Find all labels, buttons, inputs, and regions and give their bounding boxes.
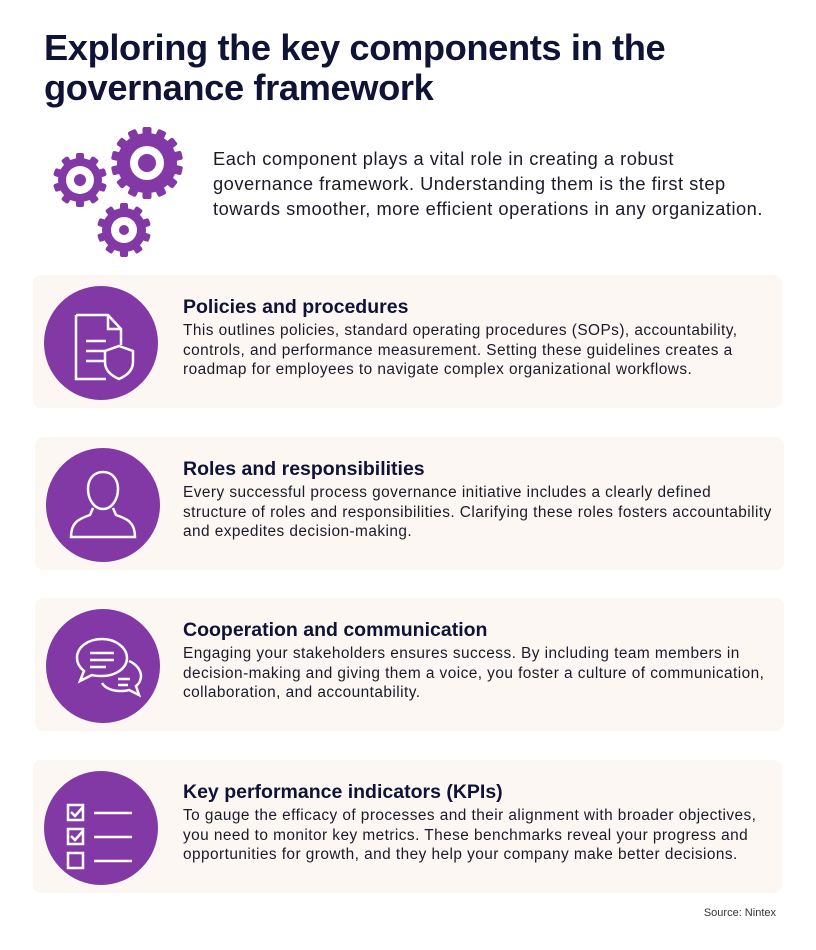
text: Every successful process governance initiative includes a clearly defined (183, 484, 711, 501)
text (183, 807, 756, 863)
icon: speech bubbles (46, 609, 160, 723)
text: opportunities for growth, and they help your company make better decisions. (183, 846, 738, 863)
panel: cooperation (35, 598, 784, 731)
text: Engaging your stakeholders ensures success. By including team members in (183, 645, 740, 662)
intro text (213, 148, 763, 219)
heading: Roles and responsibilities (183, 458, 425, 480)
icon: person (46, 448, 160, 562)
intro text: governance framework. Understanding them is the first step (213, 173, 726, 194)
text: collaboration, and accountability. (183, 684, 420, 701)
icon: checklist (44, 771, 158, 885)
icon: gears (54, 127, 183, 257)
title: Exploring the key components in the (44, 27, 665, 68)
text: To gauge the efficacy of processes and their alignment with broader objectives, (183, 807, 756, 824)
heading: Cooperation and communication (183, 619, 487, 641)
text (183, 322, 738, 378)
title: governance framework (44, 67, 433, 108)
text: structure of roles and responsibilities. Clarifying these roles fosters accountability (183, 504, 772, 520)
text (183, 484, 772, 540)
text: controls, and performance measurement. Setting these guidelines creates a (183, 342, 733, 358)
source: Source: Nintex (704, 907, 776, 919)
title (44, 27, 665, 108)
panel: policies (33, 275, 782, 408)
intro text: Each component plays a vital role in creating a robust (213, 148, 674, 169)
text (183, 645, 764, 701)
text: roadmap for employees to navigate complex organizational workflows. (183, 361, 692, 378)
panel: KPIs (33, 760, 782, 893)
heading: Policies and procedures (183, 296, 408, 318)
panel: roles (35, 437, 784, 570)
intro text: towards smoother, more efficient operations in any organization. (213, 198, 763, 219)
icon: document shield (44, 286, 158, 400)
heading: Key performance indicators (KPIs) (183, 781, 503, 803)
text: you need to monitor key metrics. These benchmarks reveal your progress and (183, 826, 748, 844)
text: This outlines policies, standard operating procedures (SOPs), accountability, (183, 322, 738, 339)
text: and expedites decision-making. (183, 523, 412, 540)
text: decision-making and giving them a voice, you foster a culture of communication, (183, 664, 764, 682)
